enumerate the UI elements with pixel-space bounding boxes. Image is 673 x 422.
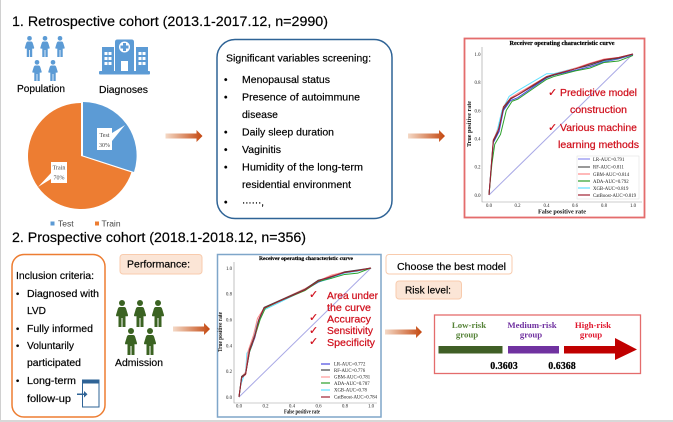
callout: test 30% — [97, 125, 125, 150]
ROC curves — [489, 54, 633, 195]
panel: inclusion criteria: Diagnosed with — [27, 289, 99, 300]
panel: retrospective ROC chart: 1.0 — [630, 204, 637, 209]
panel: retrospective ROC chart: Receiver operating characteristic curve — [510, 41, 615, 47]
label box: performance — [120, 254, 202, 274]
arrow: pie to screening — [166, 130, 202, 142]
panel: significant variables screening: Menopausal status — [242, 74, 330, 86]
low-risk group: group — [456, 330, 478, 340]
panel: prospective ROC chart: 0.8 — [342, 404, 349, 410]
medium-risk group: Medium-risk — [507, 320, 557, 330]
pie chart: test and train split — [28, 102, 137, 209]
icon: admission group — [116, 300, 164, 355]
panel: prospective ROC chart: 0.4 — [289, 404, 296, 410]
panel: prospective ROC chart: 0.6 — [226, 318, 233, 324]
icon: follow-up window with arrow — [77, 380, 99, 407]
callout: model construction notes — [548, 87, 639, 151]
panel: prospective ROC chart — [217, 254, 381, 417]
ROC legend: XGB-AUC=0.78 — [334, 388, 368, 394]
callout: performance metrics: the curve — [327, 302, 371, 314]
callout: performance metrics: ✓ — [309, 312, 318, 324]
panel: significant variables screening: Presence of autoimmune — [242, 92, 360, 104]
panel: inclusion criteria: LVD — [27, 306, 46, 317]
panel: significant variables screening: residential environment — [242, 179, 351, 191]
medium-risk group: group — [520, 330, 542, 340]
panel: inclusion criteria — [12, 254, 105, 417]
panel: significant variables screening: • — [224, 198, 228, 208]
callout: performance metrics: ✓ — [309, 336, 318, 348]
ROC legend: GBM-AUC=0.814 — [593, 173, 630, 178]
arrow: ROC to risk groups — [385, 326, 422, 338]
ROC legend: LR-AUC=0.772 — [334, 362, 366, 368]
panel: prospective ROC chart: 0.2 — [262, 404, 269, 410]
panel: retrospective ROC chart: 0.0 — [486, 204, 493, 209]
label: diagnoses: Diagnoses — [99, 85, 148, 96]
ROC curves — [239, 268, 371, 397]
icon: hospital — [99, 40, 150, 74]
panel: retrospective ROC chart: 0.8 — [601, 204, 608, 209]
panel: significant variables screening: Significant variables screening: — [226, 52, 371, 64]
panel: significant variables screening: • — [224, 75, 228, 86]
callout: train 70%: 70% — [54, 176, 64, 182]
panel: retrospective ROC chart: 0.2 — [474, 166, 481, 170]
medium-risk group — [507, 320, 559, 354]
high-risk group — [564, 320, 637, 360]
panel: prospective ROC chart: 0.0 — [236, 404, 243, 410]
panel: inclusion criteria: Inclusion criteria: — [16, 271, 94, 282]
arrow: screening to ROC — [408, 130, 445, 142]
panel: retrospective ROC chart — [464, 38, 644, 218]
panel: significant variables screening — [217, 40, 392, 218]
threshold: 0.6368: 0.6368 — [548, 361, 576, 372]
ROC legend: RF-AUC=0.811 — [593, 166, 625, 170]
callout: performance metrics: Accuracy — [327, 314, 372, 326]
callout: performance metrics: Sensitivity — [327, 325, 374, 337]
callout: test 30%: Test — [100, 133, 110, 139]
panel: retrospective ROC chart: 0.6 — [474, 110, 481, 114]
high-risk group: High-risk — [575, 320, 611, 330]
panel: inclusion criteria: participated — [27, 358, 81, 369]
low-risk group: Low-risk — [452, 320, 486, 330]
ROC legend: XGB-AUC=0.819 — [593, 187, 629, 192]
panel: inclusion criteria: • — [16, 289, 19, 300]
panel: prospective ROC chart: 0.8 — [226, 292, 233, 298]
pie slice: train 70% — [28, 103, 131, 209]
panel: significant variables screening: • — [224, 128, 228, 138]
panel: retrospective ROC chart: 1.0 — [474, 53, 481, 58]
callout: performance metrics: Specificity — [327, 337, 376, 349]
pie slice: test 30% — [83, 102, 137, 172]
panel: retrospective ROC chart: 0.8 — [474, 81, 481, 86]
ROC legend: CatBoost-AUC=0.784 — [334, 396, 378, 400]
callout: model construction notes: Predictive model — [560, 87, 637, 99]
ROC legend: GBM-AUC=0.781 — [334, 376, 371, 380]
panel: prospective ROC chart: 1.0 — [226, 267, 233, 272]
callout: performance metrics — [309, 289, 378, 349]
panel: significant variables screening: disease — [242, 109, 278, 121]
icon: population — [25, 36, 65, 81]
panel: prospective ROC chart: 1.0 — [368, 404, 375, 410]
panel: retrospective ROC chart: False positive rate — [538, 208, 586, 216]
panel: retrospective ROC chart: True positive rate — [466, 101, 473, 147]
panel: inclusion criteria: follow-up — [27, 394, 71, 405]
panel: significant variables screening: • — [224, 162, 228, 174]
ROC legend: ADA-AUC=0.792 — [593, 180, 629, 185]
callout: performance metrics: ✓ — [309, 325, 318, 337]
label box: performance: Performance: — [127, 260, 190, 270]
ROC legend — [321, 362, 378, 400]
panel: risk groups — [434, 315, 640, 374]
label box: risk level — [396, 281, 462, 299]
ROC legend: CatBoost-AUC=0.819 — [593, 194, 637, 199]
panel: inclusion criteria: Fully informed — [27, 324, 93, 335]
low-risk group — [438, 320, 502, 354]
threshold: 0.3603: 0.3603 — [490, 361, 518, 372]
label: population: Population — [17, 84, 65, 95]
callout: performance metrics: ✓ — [309, 289, 318, 301]
panel: inclusion criteria: • — [16, 341, 19, 352]
callout: model construction notes: ✓ — [548, 87, 557, 99]
title: prospective cohort: 2. Prospective cohort (2018.1-2018.12, n=356) — [12, 230, 306, 245]
panel: retrospective ROC chart: 0.2 — [514, 204, 521, 209]
panel: significant variables screening: ······, — [242, 196, 264, 208]
label box: choose the best model: Choose the best model — [397, 262, 506, 273]
callout: model construction notes: construction — [570, 104, 627, 116]
panel: significant variables screening: Daily sleep duration — [242, 126, 334, 138]
panel: prospective ROC chart: 0.0 — [226, 396, 233, 401]
panel: retrospective ROC chart: 0.4 — [544, 204, 550, 209]
ROC legend: ADA-AUC=0.787 — [334, 382, 370, 387]
panel: prospective ROC chart: 0.4 — [226, 344, 233, 350]
panel: prospective ROC chart: Receiver operating characteristic curve — [259, 256, 354, 262]
ROC legend — [577, 156, 639, 199]
legend: pie: Test — [58, 218, 74, 228]
callout: test 30%: 30% — [99, 143, 110, 149]
panel: prospective ROC chart: 0.6 — [316, 404, 322, 410]
callout: train 70% — [38, 162, 67, 187]
label box: choose the best model — [386, 254, 512, 274]
high-risk group: group — [580, 330, 602, 340]
panel: prospective ROC chart: 0.2 — [226, 370, 233, 375]
panel: retrospective ROC chart: 0.4 — [474, 138, 481, 142]
panel: inclusion criteria: • — [16, 376, 19, 387]
callout: train 70%: Train — [53, 166, 65, 172]
panel: significant variables screening: Vaginitis — [242, 144, 281, 156]
panel: inclusion criteria: Voluntarily — [27, 341, 74, 352]
legend: pie: Train — [102, 218, 121, 228]
label box: risk level: Risk level: — [405, 286, 451, 296]
callout: performance metrics: Area under — [327, 290, 378, 302]
arrow: admission to ROC — [173, 323, 210, 335]
ROC legend: LR-AUC=0.791 — [593, 158, 625, 163]
panel: inclusion criteria: • — [16, 324, 19, 335]
legend: pie — [50, 218, 121, 228]
callout: model construction notes: Various machine — [560, 122, 637, 134]
callout: model construction notes: learning methods — [558, 139, 639, 151]
panel: retrospective ROC chart: 0.6 — [572, 204, 579, 209]
panel: retrospective ROC chart: 0.0 — [474, 194, 481, 199]
callout: model construction notes: ✓ — [548, 122, 557, 134]
title: retrospective cohort: 1. Retrospective cohort (2013.1-2017.12, n=2990) — [12, 14, 328, 29]
panel: prospective ROC chart: True positive rate — [217, 312, 224, 352]
panel: prospective ROC chart: False positive rate — [284, 408, 320, 416]
panel: significant variables screening: Humidity of the long-term — [242, 162, 363, 174]
panel: significant variables screening: • — [224, 92, 228, 104]
panel: inclusion criteria: Long-term — [27, 376, 76, 387]
label: admission: Admission — [115, 358, 163, 369]
ROC legend: RF-AUC=0.776 — [334, 369, 366, 374]
panel: significant variables screening: • — [224, 145, 228, 156]
